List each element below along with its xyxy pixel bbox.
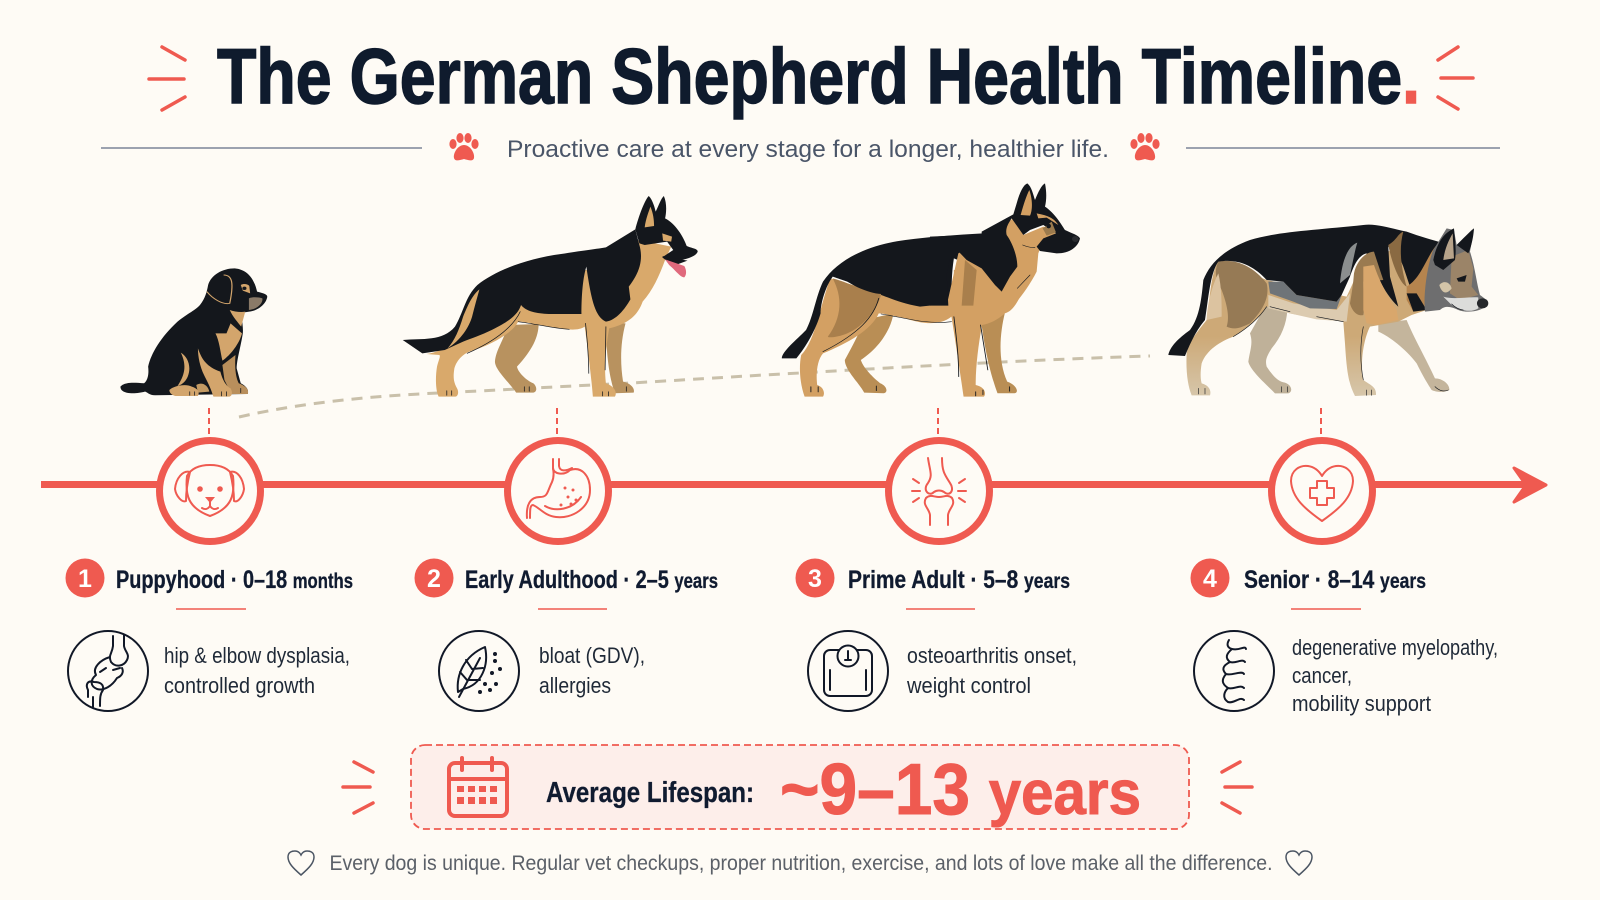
stage 2 heading (414, 558, 718, 598)
stage 1 risk icon: joint (68, 631, 148, 711)
stage 4 heading: 4 (1203, 565, 1217, 593)
callout sparks right (1222, 762, 1252, 813)
icon: calendar (449, 758, 507, 816)
dog: early adult (403, 196, 698, 397)
stage 4 risks: degenerative myelopathy, (1292, 635, 1498, 660)
stage 1 risks: controlled growth (164, 673, 315, 698)
stage icon: heart with cross (1272, 440, 1372, 542)
stage 4 risks (1292, 635, 1498, 716)
stage 4 risks: mobility support (1292, 691, 1431, 716)
connector 3 (937, 408, 939, 434)
stage 3 risks: weight control (906, 673, 1031, 698)
stage 4 heading (1190, 558, 1426, 598)
lifespan value: ~9–13 years (780, 750, 1141, 830)
stage icon: puppy face (160, 440, 260, 542)
stage 2 risks: allergies (539, 673, 611, 698)
icon: paw left (449, 133, 479, 160)
stage 3 heading: Prime Adult · 5–8 years (848, 566, 1070, 594)
stage 3 risks: osteoarthritis onset, (907, 643, 1077, 668)
dashed growth curve (239, 356, 1150, 417)
stage 3 underline (906, 608, 975, 610)
lifespan label: Average Lifespan: (546, 777, 754, 809)
stage 3 risk icon: scale (808, 631, 888, 711)
stage 2 risk icon: leaf and pollen (439, 631, 519, 711)
footer note: Every dog is unique. Regular vet checkups, proper nutrition, exercise, and lots of love make all the difference. (330, 852, 1272, 875)
stage 1 underline (176, 608, 246, 610)
connector 2 (556, 408, 558, 434)
stage 1 risks: hip & elbow dysplasia, (164, 643, 350, 668)
stage 3 heading (796, 558, 1070, 598)
stage 1 heading: 1 (78, 565, 92, 593)
icon: paw right (1130, 133, 1160, 160)
connector 4 (1320, 408, 1322, 434)
callout sparks left (343, 762, 373, 813)
stage 2 risks: bloat (GDV), (539, 643, 645, 668)
dog: senior (1168, 225, 1488, 396)
timeline arrow (41, 468, 1546, 502)
stage 2 risks (539, 643, 645, 698)
title sparks left (149, 47, 185, 110)
stage 3 heading: 3 (808, 565, 822, 593)
subtitle: Proactive care at every stage for a longer, healthier life. (507, 136, 1109, 163)
stage icon: knee joint (888, 440, 990, 542)
subtitle rule left (101, 147, 422, 149)
stage 1 risks (164, 643, 350, 698)
stage 3 risks (906, 643, 1077, 698)
dog: puppy (120, 268, 267, 397)
stage 4 risk icon: spine (1194, 631, 1274, 711)
icon: heart right (1286, 851, 1312, 875)
stage icon: stomach (508, 440, 608, 542)
connector 1 (208, 408, 210, 434)
dog: prime adult (782, 183, 1080, 397)
stage 1 heading: Puppyhood · 0–18 months (116, 566, 353, 594)
stage 4 risks: cancer, (1292, 663, 1352, 688)
title sparks right (1438, 47, 1473, 109)
stage 2 heading: 2 (427, 565, 441, 593)
stage 2 heading: Early Adulthood · 2–5 years (465, 566, 718, 594)
icon: heart left (288, 851, 314, 875)
stage 1 heading (66, 558, 353, 598)
stage 4 underline (1291, 608, 1361, 610)
dog head and ruff (930, 183, 1080, 306)
lifespan callout (411, 745, 1189, 830)
stage 4 heading: Senior · 8–14 years (1244, 566, 1426, 594)
stage 2 underline (538, 608, 607, 610)
subtitle rule right (1186, 147, 1500, 149)
